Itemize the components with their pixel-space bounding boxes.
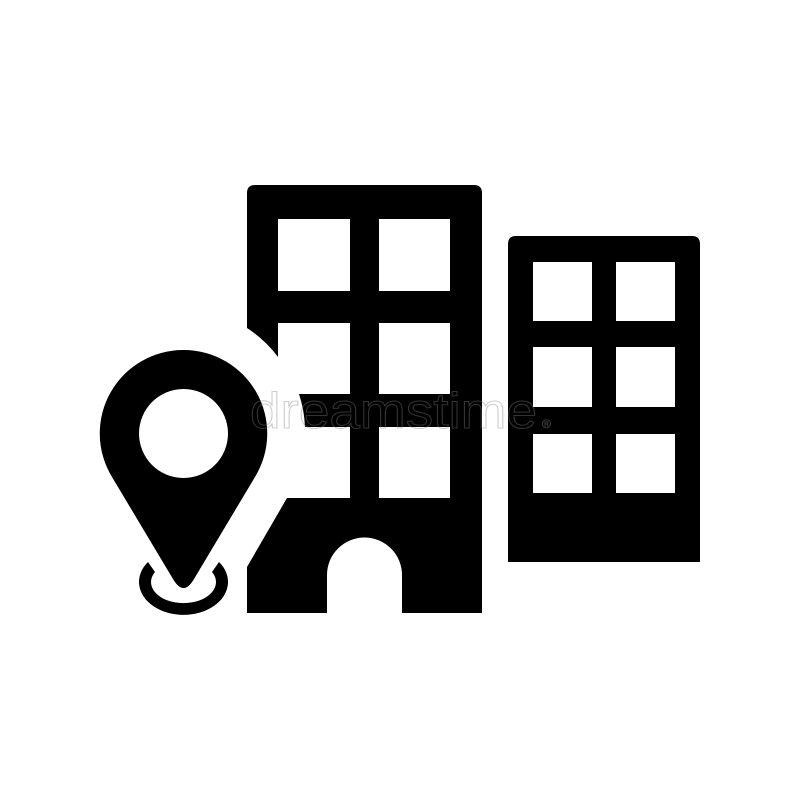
icon: location pin [100, 350, 267, 588]
icon: smaller building with six windows [508, 236, 700, 562]
watermark: ® [542, 417, 551, 431]
icon: ring beneath pin [139, 562, 228, 615]
icon: tall building with windows and arched door [247, 185, 482, 613]
watermark: dreamstime [250, 383, 537, 439]
